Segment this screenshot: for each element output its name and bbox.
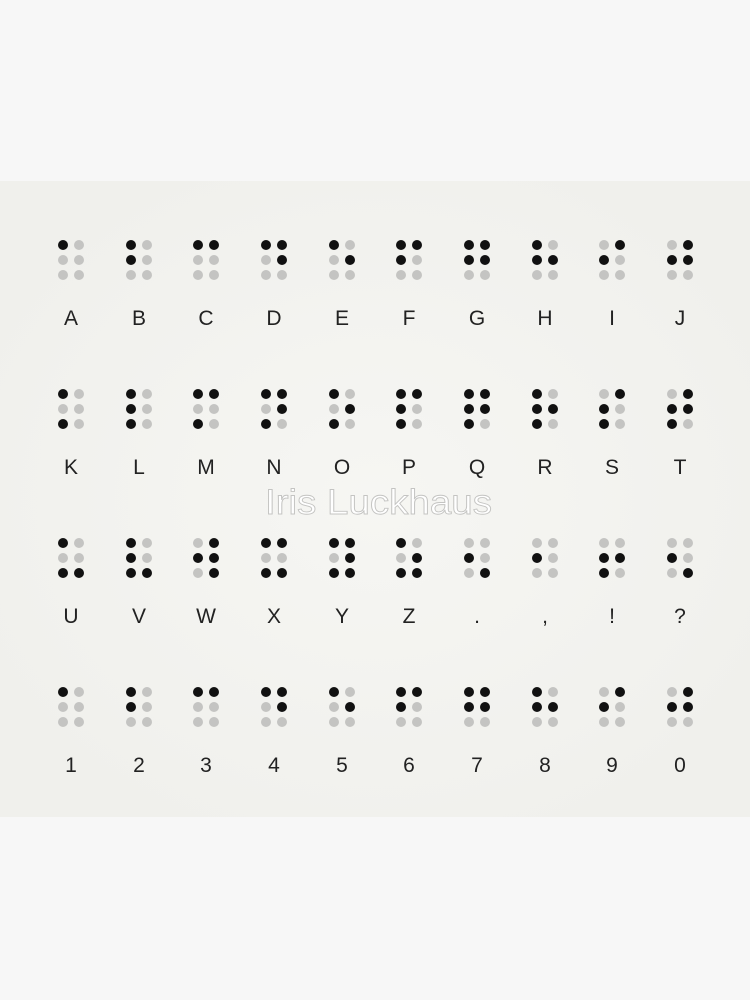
row 4: numbers 1-0: 5	[336, 754, 348, 777]
row 4: numbers 1-0: 8	[539, 754, 551, 777]
row 3: letters U-Z and punctuation: V	[132, 605, 146, 628]
row 1: letters A-J: I	[609, 307, 615, 330]
row 4: numbers 1-0: 1	[65, 754, 77, 777]
row 2: letters K-T: L	[133, 456, 145, 479]
row 4: numbers 1-0: 4	[268, 754, 280, 777]
row 1: letters A-J	[58, 240, 693, 330]
row 1: letters A-J: J	[675, 307, 685, 330]
row 3: letters U-Z and punctuation	[58, 538, 693, 628]
row 3: letters U-Z and punctuation: !	[609, 605, 615, 628]
row 3: letters U-Z and punctuation: Y	[335, 605, 349, 628]
row 1: letters A-J: D	[266, 307, 282, 330]
panel: braille chart background	[0, 181, 750, 817]
row 2: letters K-T: R	[537, 456, 553, 479]
row 2: letters K-T: P	[402, 456, 416, 479]
row 2: letters K-T	[58, 389, 693, 479]
row 3: letters U-Z and punctuation: U	[63, 605, 79, 628]
row 2: letters K-T: O	[334, 456, 350, 479]
row 1: letters A-J: E	[335, 307, 349, 330]
row 1: letters A-J: H	[537, 307, 553, 330]
row 1: letters A-J: B	[132, 307, 146, 330]
row 3: letters U-Z and punctuation: X	[267, 605, 281, 628]
row 3: letters U-Z and punctuation: Z	[403, 605, 416, 628]
row 4: numbers 1-0	[58, 687, 693, 777]
row 3: letters U-Z and punctuation: W	[196, 605, 216, 628]
row 4: numbers 1-0: 6	[403, 754, 415, 777]
row 1: letters A-J: C	[198, 307, 214, 330]
row 4: numbers 1-0: 2	[133, 754, 145, 777]
row 2: letters K-T: M	[197, 456, 215, 479]
row 2: letters K-T: N	[266, 456, 282, 479]
row 2: letters K-T: Q	[469, 456, 485, 479]
row 4: numbers 1-0: 7	[471, 754, 483, 777]
row 4: numbers 1-0: 3	[200, 754, 212, 777]
row 3: letters U-Z and punctuation: ?	[674, 605, 686, 628]
row 3: letters U-Z and punctuation: .	[474, 605, 480, 628]
row 3: letters U-Z and punctuation: ,	[542, 605, 548, 628]
row 4: numbers 1-0: 9	[606, 754, 618, 777]
row 2: letters K-T: T	[674, 456, 687, 479]
row 1: letters A-J: F	[403, 307, 415, 330]
row 2: letters K-T: S	[605, 456, 619, 479]
row 2: letters K-T: K	[64, 456, 78, 479]
row 1: letters A-J: G	[469, 307, 485, 330]
row 1: letters A-J: A	[64, 307, 78, 330]
row 4: numbers 1-0: 0	[674, 754, 686, 777]
watermark: Iris Luckhaus	[265, 483, 492, 522]
